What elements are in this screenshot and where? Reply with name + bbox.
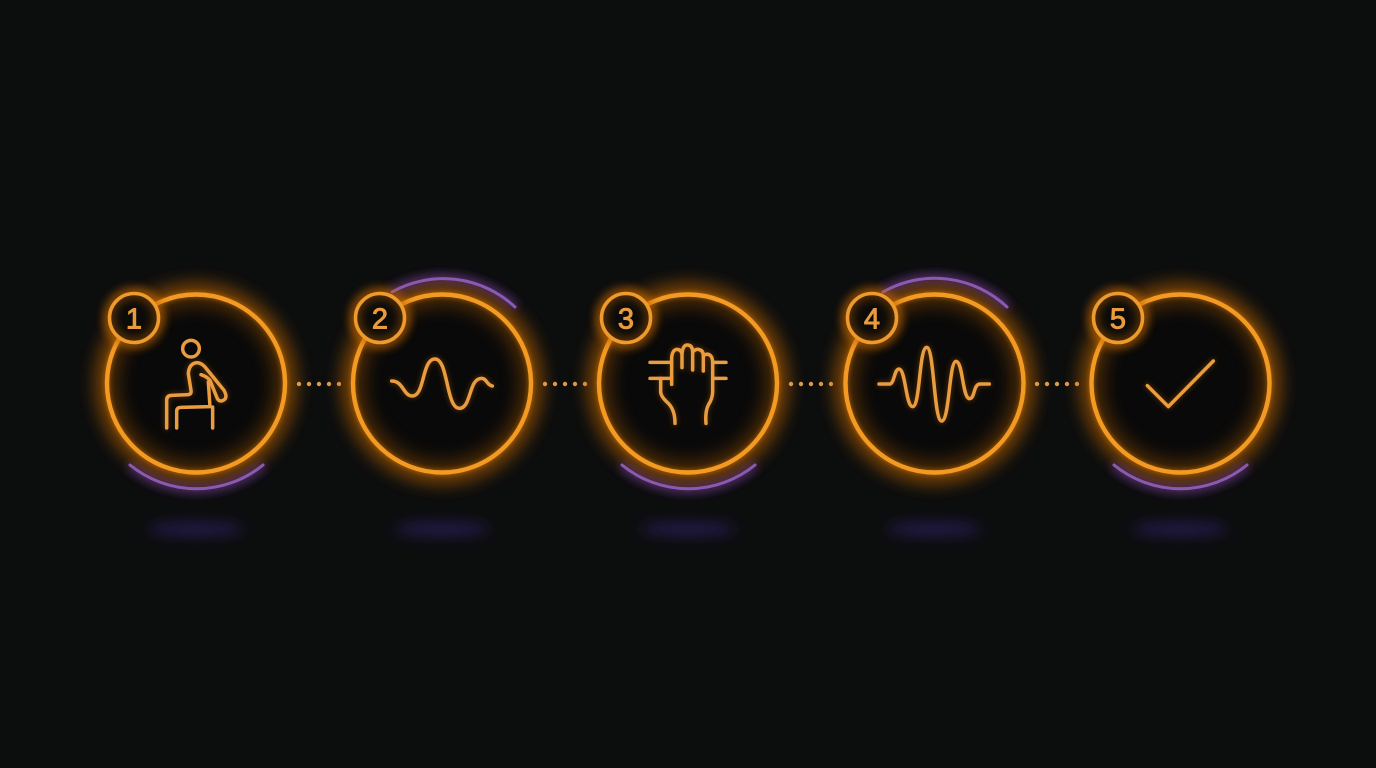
connector dots 2: [543, 382, 587, 386]
icon: strong wave: [879, 347, 989, 421]
ring 5: [1092, 294, 1270, 472]
badge 4: 4: [864, 304, 880, 336]
step 3: gripping hand: [599, 293, 833, 535]
floor shadow 3: [640, 523, 736, 535]
purple arc 3: [622, 465, 755, 489]
purple arc 5: [1114, 465, 1247, 489]
icon: gentle wave: [392, 359, 492, 408]
step 1: sitting person: [107, 293, 341, 535]
connector dots 4: [1035, 382, 1079, 386]
floor shadow 5: [1132, 523, 1228, 535]
ring 4: [846, 294, 1024, 472]
connector dots 1: [297, 382, 341, 386]
icon: check mark: [1147, 361, 1213, 407]
badge 4: [847, 293, 897, 343]
badge 2: 2: [372, 304, 388, 336]
ring 2: [353, 294, 531, 472]
badge 1: 1: [126, 304, 142, 336]
step 4: strong wave: [846, 278, 1079, 535]
badge 1: [109, 293, 159, 343]
purple arc 4: [883, 278, 1007, 307]
badge 3: [601, 293, 651, 343]
icon: sitting person: [167, 340, 226, 428]
ring 1: [107, 294, 285, 472]
purple arc 2: [392, 279, 515, 307]
step 5: check mark: [1092, 293, 1270, 535]
icon: gripping hand: [650, 345, 726, 423]
floor shadow 2: [394, 523, 490, 535]
floor shadow 4: [886, 523, 982, 535]
connector dots 3: [789, 382, 833, 386]
badge 2: [355, 293, 405, 343]
badge 5: [1093, 293, 1143, 343]
badge 3: 3: [618, 304, 634, 336]
floor shadow 1: [148, 523, 244, 535]
ring 3: [599, 294, 777, 472]
badge 5: 5: [1110, 304, 1126, 336]
purple arc 1: [130, 465, 263, 489]
step 2: gentle wave: [353, 279, 587, 535]
